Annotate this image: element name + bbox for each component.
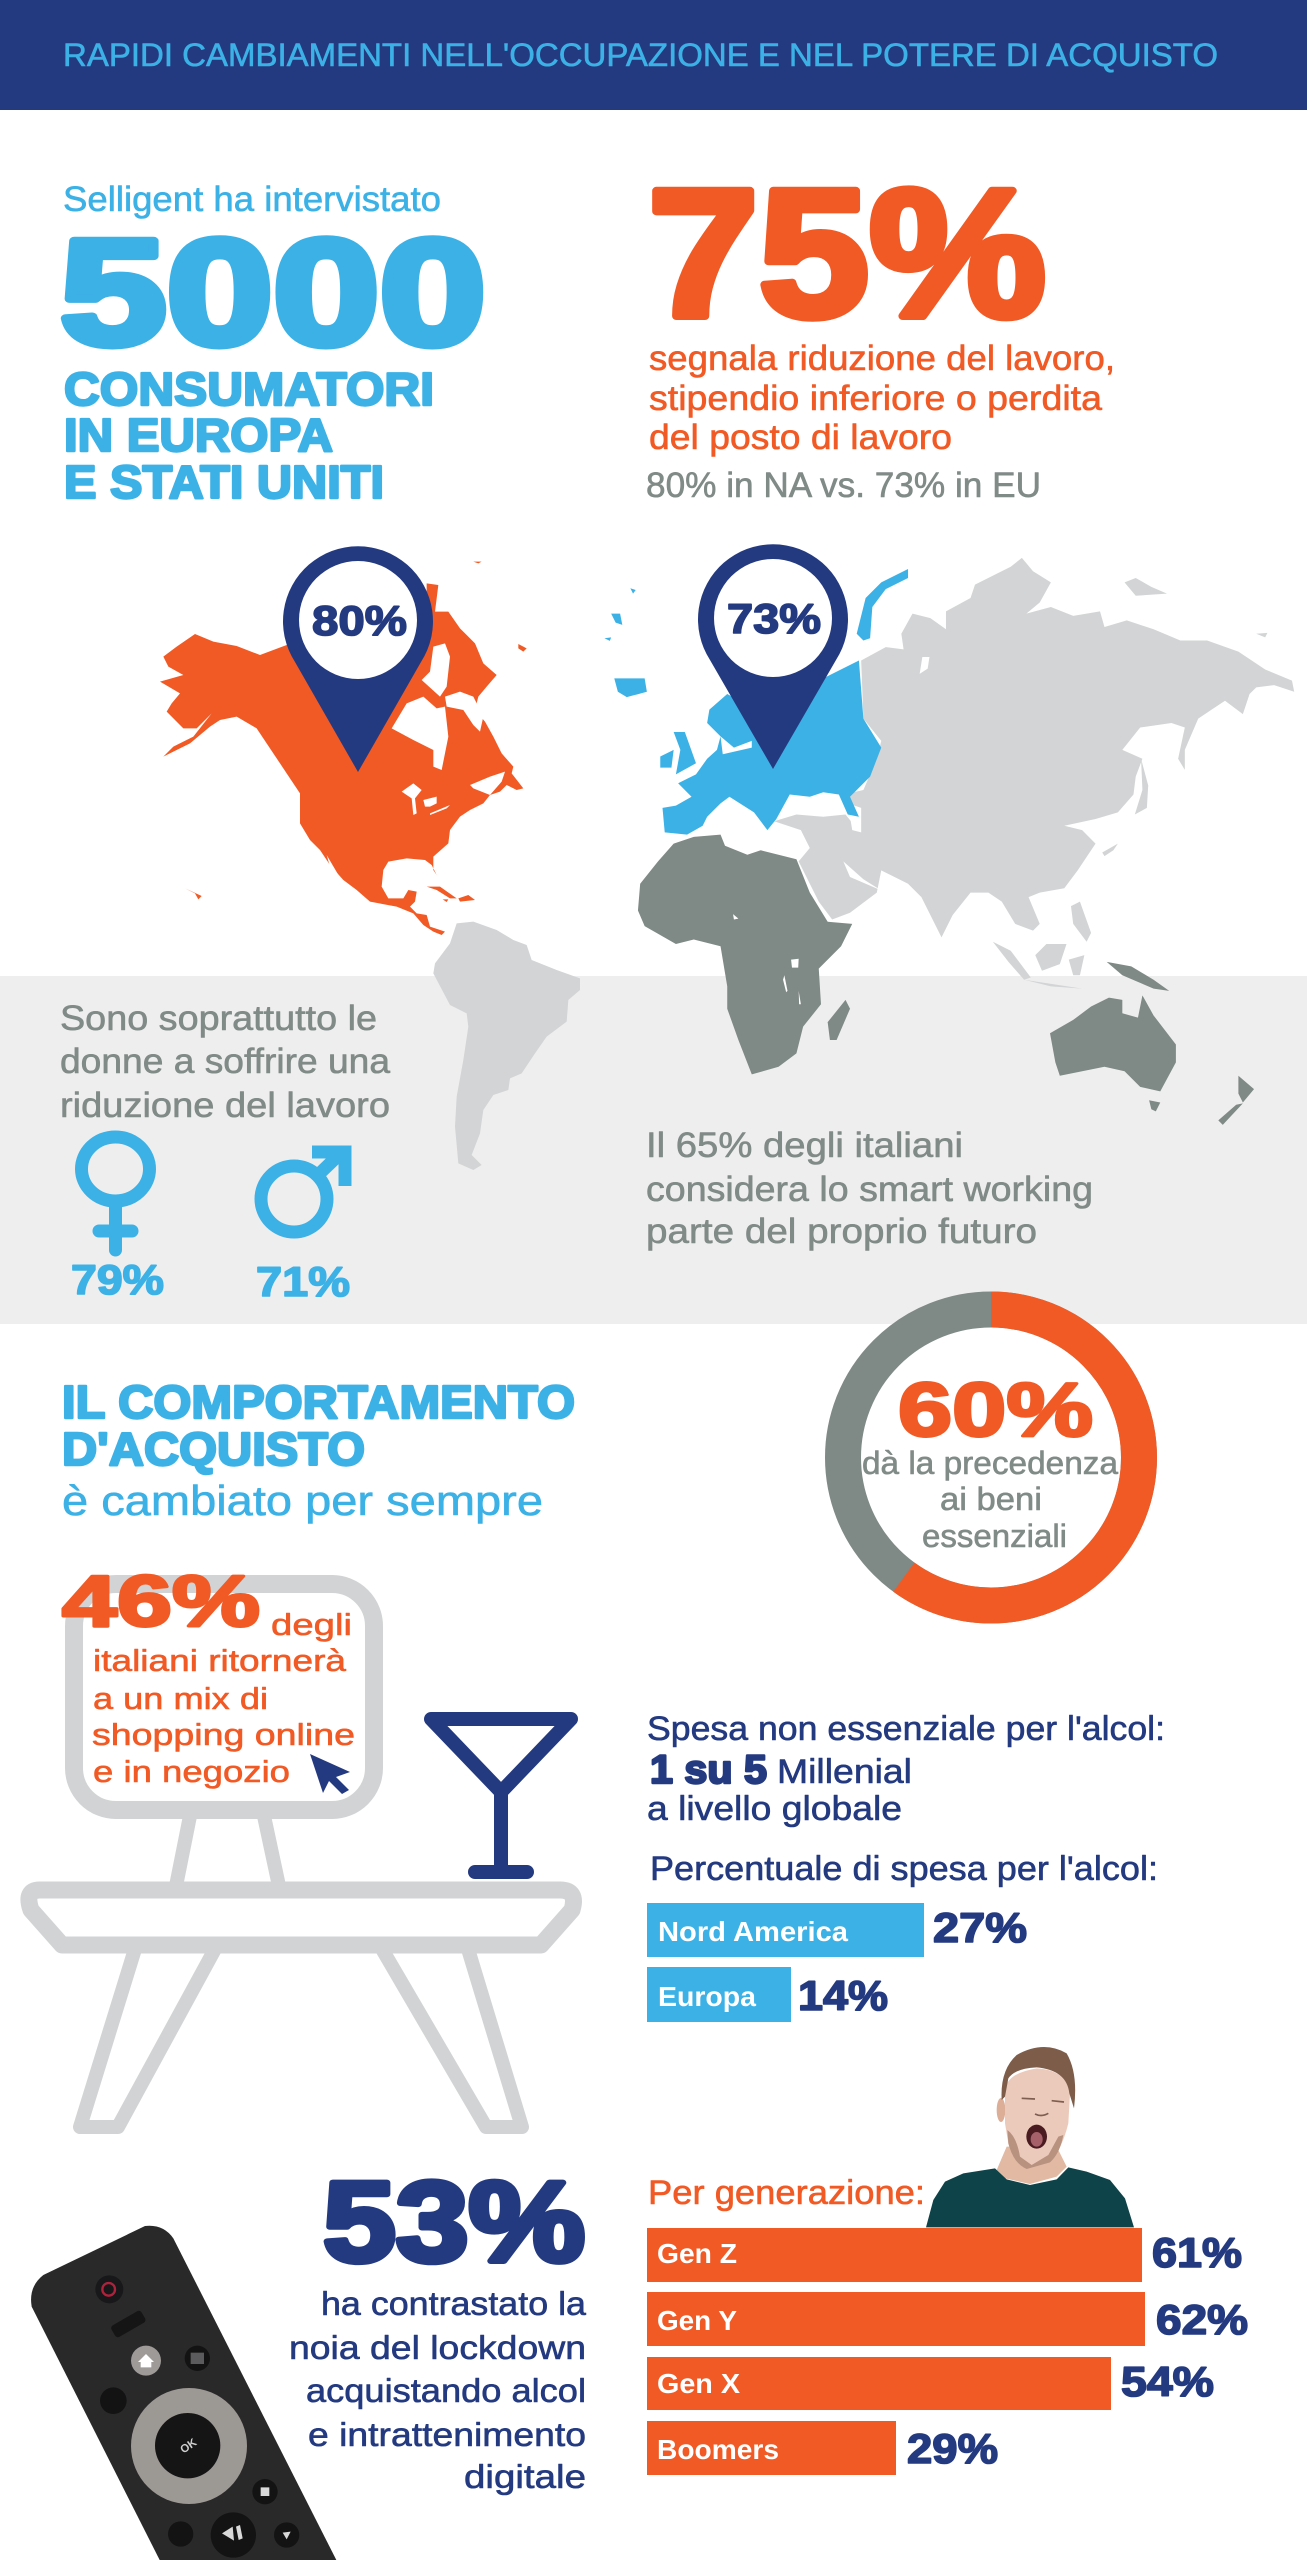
smart working text: parte del proprio futuro (646, 1212, 1037, 1251)
asian islands (993, 578, 1267, 989)
madagascar (828, 1000, 850, 1040)
home button (131, 2346, 161, 2376)
icon: cursor (310, 1754, 350, 1794)
53% description (289, 2285, 587, 2495)
arabian gulf and inland seas (785, 657, 929, 890)
europe (663, 661, 881, 835)
uk, iceland and arctic islands (604, 569, 908, 774)
header title: RAPIDI CAMBIAMENTI NELL'OCCUPAZIONE E NEL POTERE DI ACQUISTO (63, 37, 1218, 73)
world map (160, 558, 1294, 1170)
stubble (1007, 2130, 1063, 2169)
53% description: noia del lockdown (289, 2329, 586, 2366)
bar: Gen Z (647, 2228, 1242, 2282)
d-pad ring (131, 2388, 247, 2504)
monitor on table illustration (29, 1562, 573, 2127)
75% description: stipendio inferiore o perdita (649, 379, 1103, 418)
north america (160, 562, 527, 935)
consumers label (64, 363, 434, 508)
big number 5000: 5000 (60, 208, 486, 376)
d-pad ring: OK (178, 2436, 200, 2456)
icon: male symbol (261, 1150, 345, 1232)
monitor text: shopping online (92, 1717, 355, 1752)
alcohol text (647, 1710, 1165, 1888)
map pin: europe 73%: 73% (727, 595, 821, 642)
bar: Europa (647, 1967, 888, 2022)
53% description: acquistando alcol (306, 2372, 586, 2409)
generation heading: Per generazione: (648, 2174, 925, 2212)
africa (638, 835, 852, 1074)
bar: Boomers (647, 2421, 998, 2475)
bar: Gen Y: 62% (1156, 2296, 1248, 2343)
bar: Nord America (647, 1903, 1027, 1957)
block: survey 5000 consumers (60, 180, 486, 508)
eject button (110, 2310, 147, 2338)
bar: Gen X (647, 2357, 1214, 2410)
heading: purchasing behaviour: è cambiato per sempre (62, 1477, 543, 1524)
australia and islands (1050, 962, 1254, 1125)
header banner (0, 0, 1307, 110)
gender text: Sono soprattutto le (60, 999, 377, 1038)
block: 75 percent (646, 151, 1115, 505)
53% description: digitale (464, 2458, 586, 2495)
caribbean, greenland fragment and hawaii (185, 562, 527, 902)
male percentage: 71% (256, 1258, 350, 1305)
heading: purchasing behaviour: IL COMPORTAMENTO (62, 1376, 575, 1428)
icon: martini glass (431, 1719, 571, 1872)
monitor text (92, 1607, 355, 1789)
bar: Gen X: 54% (1121, 2358, 1214, 2405)
female percentage: 79% (71, 1256, 164, 1303)
eyes and nose (1022, 2098, 1064, 2116)
hudson bay, lakes and channels (327, 643, 505, 883)
bar: Boomers: 29% (907, 2425, 998, 2472)
remote body (31, 2226, 337, 2560)
block: 53 percent (289, 2159, 587, 2495)
monitor text: degli (271, 1607, 352, 1642)
shirt (926, 2167, 1134, 2227)
bar: Gen Y (647, 2292, 1248, 2346)
button glyphs (222, 2487, 291, 2541)
bar: Gen Z: 61% (1152, 2229, 1242, 2276)
monitor text: a un mix di (93, 1681, 268, 1716)
big number 53%: 53% (323, 2159, 585, 2286)
75% description: segnala riduzione del lavoro, (649, 339, 1115, 378)
smart working text (646, 1126, 1093, 1251)
donut chart: 60%: 60% (898, 1368, 1093, 1453)
bar: Europa: Europa (658, 1981, 756, 2012)
bar: Gen X: Gen X (657, 2368, 740, 2399)
neck (997, 2147, 1067, 2184)
alcohol text: Millenial (777, 1753, 912, 1791)
block: alcohol spending (647, 1710, 1165, 2022)
gender text: riduzione del lavoro (60, 1086, 390, 1125)
heading: purchasing behaviour (62, 1376, 575, 1524)
ear (997, 2098, 1005, 2122)
hair (1002, 2047, 1075, 2108)
75% description: del posto di lavoro (649, 418, 952, 457)
alcohol text: Percentuale di spesa per l'alcol: (650, 1850, 1158, 1888)
grey band (0, 976, 1307, 1324)
mouth (1026, 2125, 1047, 2149)
alcohol text: a livello globale (647, 1790, 902, 1828)
bar: Boomers: Boomers (657, 2434, 779, 2465)
round buttons (100, 2346, 299, 2558)
table legs (80, 1949, 522, 2127)
power button (95, 2275, 123, 2303)
monitor frame (74, 1584, 374, 1810)
bar: Gen Z: Gen Z (657, 2238, 737, 2269)
table top (29, 1890, 573, 1945)
baltic sea (721, 736, 752, 754)
monitor 46%: 46% (62, 1562, 260, 1642)
south america (433, 922, 580, 1170)
donut chart: 60%: dà la precedenza (862, 1445, 1118, 1481)
big number 75%: 75% (648, 151, 1046, 355)
monitor text: e in negozio (93, 1754, 290, 1789)
bar: Nord America: 27% (933, 1904, 1027, 1951)
gender text (60, 999, 391, 1125)
african lakes (733, 914, 801, 1004)
block: by generation (647, 2174, 1248, 2475)
regional comparison: 80% in NA vs. 73% in EU (646, 466, 1041, 505)
eurasia, europe, africa and oceania (604, 558, 1294, 1125)
monitor text: italiani ritornerà (93, 1643, 347, 1678)
gender text: donne a soffrire una (60, 1042, 391, 1081)
icon: female symbol (82, 1137, 150, 1250)
donut chart: 60% (843, 1310, 1139, 1606)
block: gender gap (60, 999, 391, 1305)
remote control photo (31, 2226, 337, 2560)
face (1005, 2068, 1070, 2168)
heading: purchasing behaviour: D'ACQUISTO (62, 1423, 365, 1475)
53% description: e intrattenimento (308, 2416, 586, 2453)
consumers label: IN EUROPA (64, 409, 333, 461)
53% description: ha contrastato la (321, 2285, 587, 2322)
yawning man photo (926, 2047, 1134, 2227)
75% description (649, 339, 1115, 457)
smart working text: considera lo smart working (646, 1170, 1093, 1209)
consumers label: E STATI UNITI (64, 456, 384, 508)
donut chart: 60%: essenziali (922, 1518, 1067, 1554)
map pin: europe 73% (698, 544, 848, 769)
map pin: north america 80% (283, 546, 433, 772)
survey intro: Selligent ha intervistato (63, 180, 441, 219)
bar: Gen Y: Gen Y (657, 2305, 737, 2336)
smart working text: Il 65% degli italiani (646, 1126, 963, 1165)
map pin: north america 80%: 80% (312, 597, 407, 644)
alcohol text: Spesa non essenziale per l'alcol: (647, 1710, 1165, 1748)
consumers label: CONSUMATORI (64, 363, 434, 415)
alcohol text: 1 su 5 (650, 1748, 767, 1792)
monitor stand (176, 1816, 279, 1886)
donut chart: 60%: ai beni (940, 1481, 1042, 1517)
bar: Nord America: Nord America (658, 1916, 848, 1947)
asia (774, 558, 1294, 937)
bar: Europa: 14% (798, 1972, 888, 2019)
